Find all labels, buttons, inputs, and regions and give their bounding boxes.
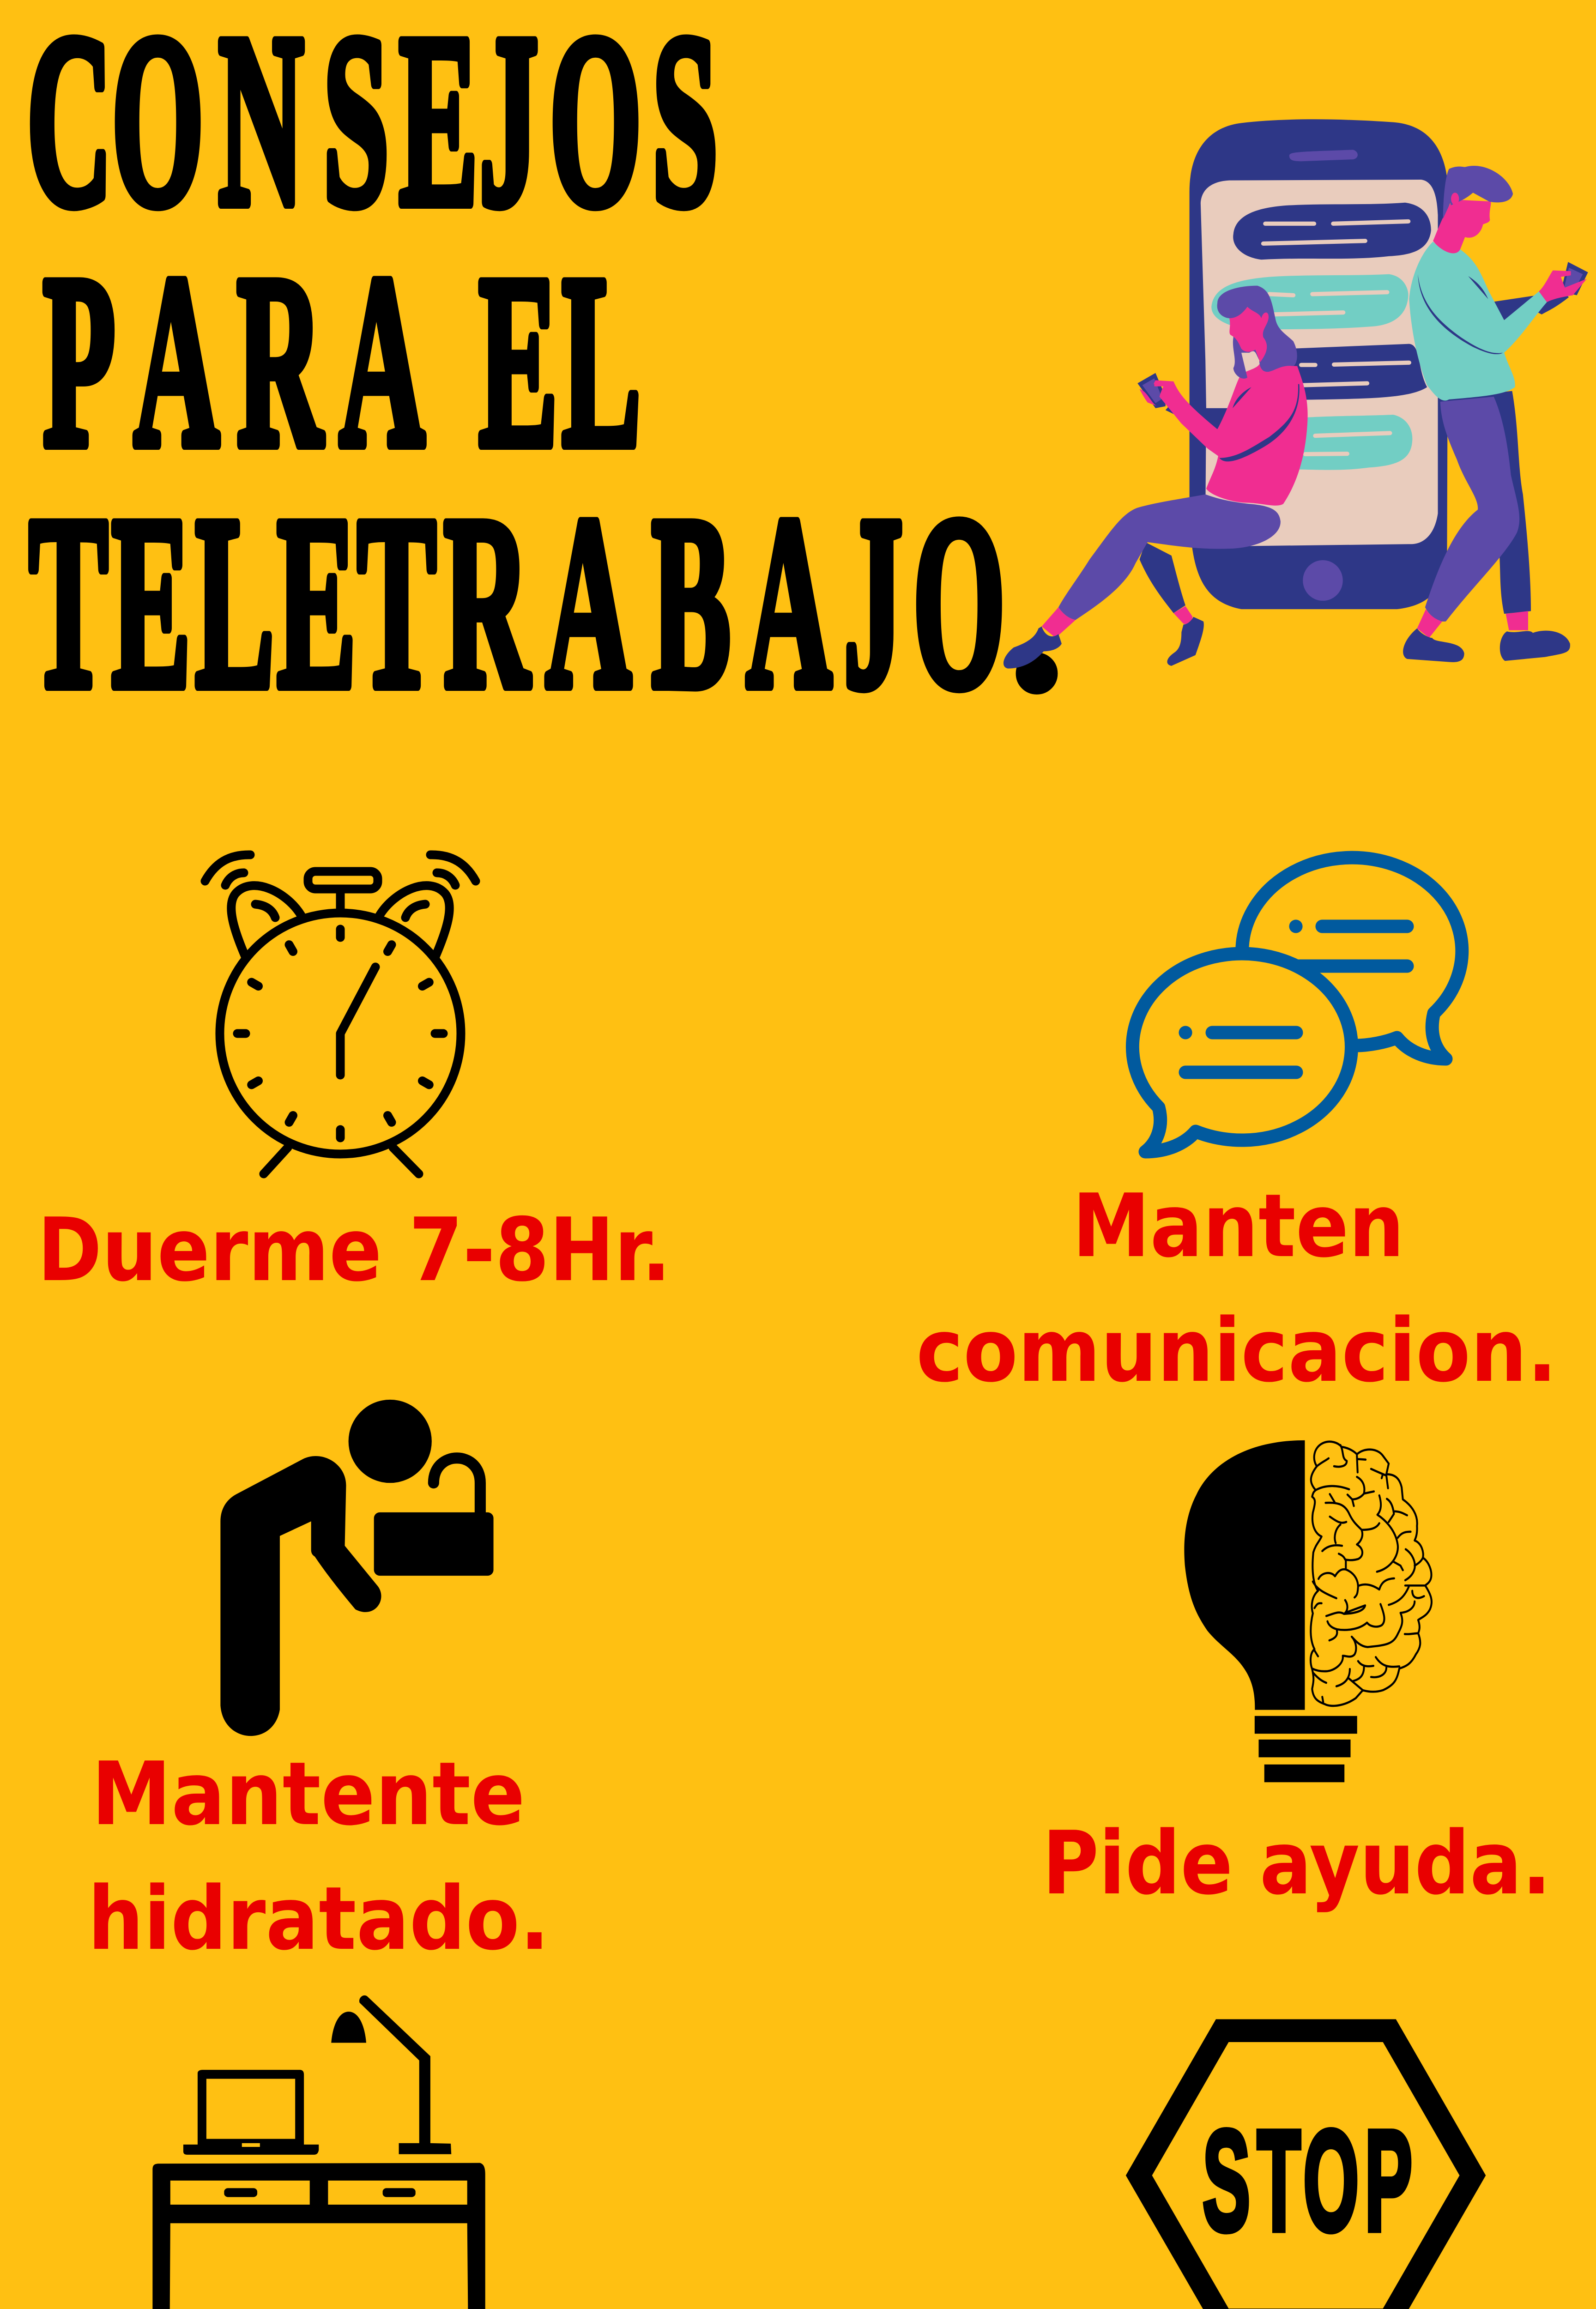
label: duerme: Duerme 7-8Hr. bbox=[37, 1199, 671, 1301]
title: PARA EL bbox=[43, 224, 641, 498]
icon: stop sign bbox=[1126, 2019, 1486, 2309]
phone bbox=[1190, 119, 1448, 609]
icon: stop sign: STOP bbox=[1203, 2100, 1412, 2261]
icon: person at water fountain bbox=[220, 1400, 494, 1736]
panel: duerme bbox=[37, 855, 671, 1301]
icon: lightbulb and brain bbox=[1184, 1440, 1432, 1782]
label: mantente hidratado: Mantente bbox=[91, 1743, 525, 1845]
title bbox=[27, 0, 1069, 747]
panel: toma pausas bbox=[991, 2019, 1551, 2309]
label: manten comunicacion bbox=[916, 1175, 1557, 1402]
panel: comunicacion bbox=[916, 858, 1557, 1402]
label: manten comunicacion: Manten bbox=[1072, 1175, 1404, 1277]
label: mantente hidratado bbox=[88, 1743, 550, 1970]
panel: hidratado bbox=[88, 1400, 550, 1970]
icon: chat bubbles bbox=[1132, 858, 1462, 1152]
label: mantente hidratado: hidratado. bbox=[88, 1868, 550, 1970]
woman bbox=[1004, 286, 1308, 669]
icon: alarm clock bbox=[205, 855, 476, 1174]
title: TELETRABAJO bbox=[29, 465, 1005, 739]
panel: espacio de trabajo bbox=[51, 1995, 641, 2309]
icon: desk with laptop and lamp bbox=[152, 1995, 485, 2309]
panel: pide ayuda bbox=[1042, 1440, 1551, 1914]
illustration: two people texting beside a giant phone bbox=[1004, 119, 1588, 669]
man bbox=[1403, 166, 1588, 662]
title: . bbox=[1004, 461, 1069, 747]
